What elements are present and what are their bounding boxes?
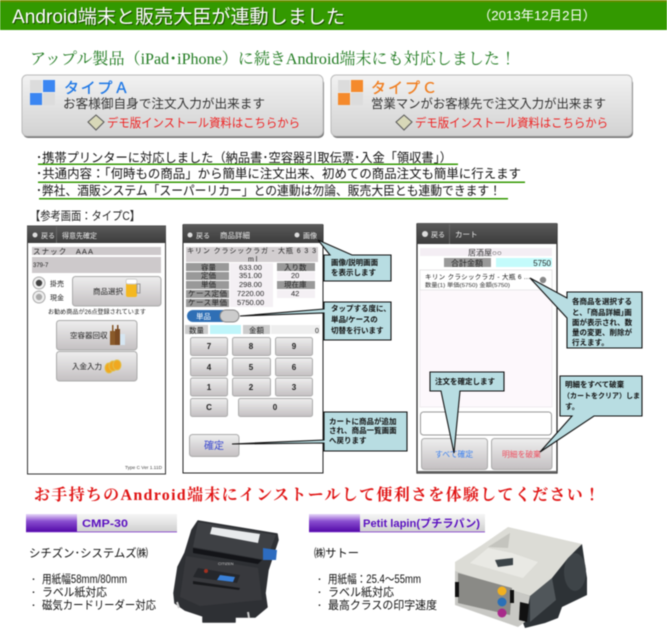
callout: image screen: [318, 240, 391, 281]
product table: ケース定価: [188, 288, 228, 298]
callout: image screen: を表示します: [331, 267, 376, 277]
type C label: タイプＣ: [371, 80, 437, 97]
icon: type C squares: [338, 80, 363, 105]
panel: screen 3 cart: 5750: [533, 259, 552, 268]
product table: 20: [291, 271, 299, 280]
panel: screen 2 product detail: 金額: [249, 325, 264, 335]
text block: Sato printer: ･: [317, 575, 322, 586]
keypad: 2: [249, 383, 254, 392]
type A label: タイプＡ: [64, 80, 129, 97]
panel: screen 1 customer confirmation: 得意先確定: [62, 231, 97, 240]
icon: document: [396, 115, 412, 130]
toggle: [187, 310, 239, 322]
product table: 容量: [201, 262, 216, 272]
keypad: 3: [292, 383, 297, 392]
callout: cart item: 面が表示され、数: [572, 317, 633, 327]
callout: cart item: と、｢商品詳細｣画: [572, 307, 632, 317]
text block: Citizen printer: シチズン･システムズ㈱: [29, 546, 148, 560]
label: Petit lapin: [309, 514, 485, 532]
call to action heading: お手持ちのAndroid端末にインストールして便利さを体験してください！: [34, 485, 600, 504]
text block: Citizen printer: ･: [31, 575, 36, 586]
header band: [0, 0, 667, 30]
bullet list: ･携帯プリンターに対応しました（納品書･空容器引取伝票･入金「領収書」）: [36, 150, 452, 165]
label: CMP-30: CMP-30: [82, 518, 128, 530]
callout: image screen: 画像/説明画面: [331, 257, 379, 267]
product table: 単価: [201, 279, 216, 289]
toggle: 単品: [196, 311, 211, 321]
panel: screen 3 cart: 居酒屋○○: [468, 248, 502, 258]
text block: Citizen printer: ･: [31, 588, 36, 599]
text block: Sato printer: ･: [317, 588, 322, 599]
callout: clear cart: 明細をすべて破棄: [565, 379, 625, 389]
product table: 7220.00: [237, 289, 264, 298]
type C description: 営業マンがお客様先で注文入力が出来ます: [371, 96, 606, 111]
panel: screen 3 cart: キリン クラシックラガ - 大瓶 6 ...: [425, 272, 530, 281]
icon: coins: [105, 360, 121, 373]
keypad: 4: [207, 363, 212, 372]
panel: screen 1 customer confirmation: Type C Ver 1.11D: [125, 465, 163, 470]
text block: Sato printer: 用紙幅：25.4～55mm: [328, 572, 421, 586]
keypad: C: [206, 403, 212, 412]
panel: screen 1 customer confirmation: 戻る: [41, 232, 55, 240]
product table: 定価: [201, 270, 216, 280]
icon: document: [88, 115, 104, 130]
icon: bottles: [110, 325, 125, 345]
keypad: 5: [249, 363, 254, 372]
callout: clear cart: [540, 376, 642, 452]
text block: Citizen printer: [29, 546, 156, 612]
callout: confirm: され、商品一覧画面: [329, 425, 397, 435]
panel: screen 3 cart: すべて確定: [435, 449, 473, 459]
panel: screen 3 cart: カート: [455, 230, 478, 239]
callout: clear cart: す。: [565, 402, 579, 411]
panel: screen 3 cart: 戻る: [431, 231, 445, 239]
keypad: [190, 338, 312, 416]
panel: type A button: [22, 75, 324, 138]
callout: confirm: [232, 412, 407, 451]
text block: Citizen printer: 用紙幅58mm/80mm: [42, 572, 127, 586]
callout: confirm order: 注文を確定します: [435, 376, 495, 386]
text block: Sato printer: ラベル紙対応: [328, 585, 394, 599]
panel: type C button: [331, 75, 633, 138]
product table: [186, 262, 315, 307]
keypad: 6: [292, 363, 297, 372]
type C link: デモ版インストール資料はこちらから: [415, 115, 608, 130]
callout: cart item: 量の変更、削除が: [572, 327, 632, 337]
callout: toggle: 単品/ケースの: [331, 314, 378, 324]
panel: screen 3 cart: 明細を破棄: [502, 449, 541, 459]
product table: ケース単価: [188, 297, 228, 307]
panel: screen 1 customer confirmation: スナック AAA: [33, 247, 93, 256]
icon: type A squares: [30, 80, 55, 105]
callout: confirm: へ戻ります: [329, 436, 367, 445]
text block: Citizen printer: ラベル紙対応: [42, 585, 107, 599]
panel: screen 1 customer confirmation: 掛売: [50, 279, 64, 288]
keypad: 0: [273, 403, 278, 412]
bullet list: [36, 150, 525, 200]
panel: screen 2 product detail: 画像: [303, 231, 317, 240]
product table: 現在庫: [284, 279, 307, 289]
bullet list: ･弊社、酒販システム「スーパーリカー」との連動は勿論、販売大臣とも連動できます！: [36, 183, 501, 198]
keypad: 1: [207, 383, 212, 392]
callout: cart item: [530, 278, 642, 348]
text block: Sato printer: ･: [317, 601, 322, 612]
panel: screen 2 product detail: 数量: [189, 325, 204, 335]
product table: 入り数: [284, 262, 307, 272]
callout: toggle: タップする度に、: [331, 303, 391, 313]
panel: screen 2 product detail: キリン クラシックラガ - 大瓶 6 3 3: [187, 246, 316, 255]
callout: toggle: [240, 302, 391, 340]
type A description: お客様御自身で注文入力が出来ます: [63, 96, 265, 111]
product table: 633.00: [239, 263, 262, 272]
icon: Citizen printer: [174, 521, 278, 622]
title: Android端末と販売大臣が連動しました: [13, 7, 346, 29]
text block: Citizen printer: ･: [31, 601, 36, 612]
product table: 5750.00: [237, 298, 264, 307]
product table: 351.00: [239, 271, 262, 280]
panel: screen 1 customer confirmation: [27, 226, 166, 474]
type A link: デモ版インストール資料はこちらから: [107, 115, 300, 130]
label: CMP-30: [26, 514, 177, 532]
callout: confirm: カートに商品が追加: [329, 416, 396, 426]
label: Petit lapin: Petit lapin(プチラパン): [363, 517, 480, 530]
panel: screen 1 customer confirmation: 入金入力: [72, 361, 102, 371]
product table: 42: [291, 289, 299, 298]
subheading: アップル製品（iPad･iPhone）に続きAndroid端末にも対応しました！: [30, 49, 516, 68]
panel: screen 1 customer confirmation: 現金: [50, 293, 64, 302]
panel: screen 1 customer confirmation: 商品選択: [93, 286, 123, 296]
reference screens heading: 【参考画面：タイプC】: [30, 209, 140, 223]
icon: Citizen printer: CITIZEN: [218, 561, 234, 566]
text block: Sato printer: 最高クラスの印字速度: [328, 599, 437, 612]
panel: screen 3 cart: [417, 223, 557, 473]
bullet list: ･共通内容：「何時もの商品」から簡単に注文出来、初めての商品注文も簡単に行えます: [36, 166, 521, 181]
panel: screen 3 cart: 数量(1) 単価(5750) 金額(5750): [425, 281, 510, 289]
panel: screen 1 customer confirmation: 379-7: [33, 263, 49, 269]
panel: screen 3 cart: 合計金額: [451, 258, 483, 268]
keypad: 8: [249, 342, 254, 351]
title: Android端末と販売大臣が連動しました: [12, 6, 345, 28]
panel: screen 2 product detail: [183, 224, 323, 473]
keypad: 7: [207, 342, 212, 351]
panel: screen 2 product detail: 商品詳細: [220, 230, 250, 240]
text block: Sato printer: ㈱サトー: [314, 547, 359, 560]
panel: screen 1 customer confirmation: お勧め商品が26点登録されています: [48, 308, 146, 316]
callout: toggle: 切替を行います: [331, 325, 384, 335]
panel: screen 2 product detail: 0: [315, 328, 319, 335]
date: （2013年12月2日）: [478, 8, 596, 23]
callout: confirm order: [430, 372, 504, 453]
panel: screen 2 product detail: 戻る: [196, 232, 210, 240]
text block: Citizen printer: 磁気カードリーダー対応: [42, 598, 156, 612]
callout: clear cart: （カートをクリア）しま: [563, 391, 640, 400]
icon: Sato printer: [455, 527, 587, 628]
callout: cart item: 各商品を選択する: [572, 296, 632, 306]
product table: 298.00: [239, 280, 262, 289]
callout: cart item: 行えます。: [572, 337, 609, 347]
text block: Sato printer: [314, 547, 437, 612]
panel: screen 2 product detail: m l: [248, 256, 258, 264]
keypad: 9: [292, 342, 297, 351]
icon: beer mug: [126, 279, 140, 297]
panel: screen 1 customer confirmation: 空容器回収: [70, 330, 108, 340]
panel: screen 2 product detail: 確定: [204, 439, 224, 452]
